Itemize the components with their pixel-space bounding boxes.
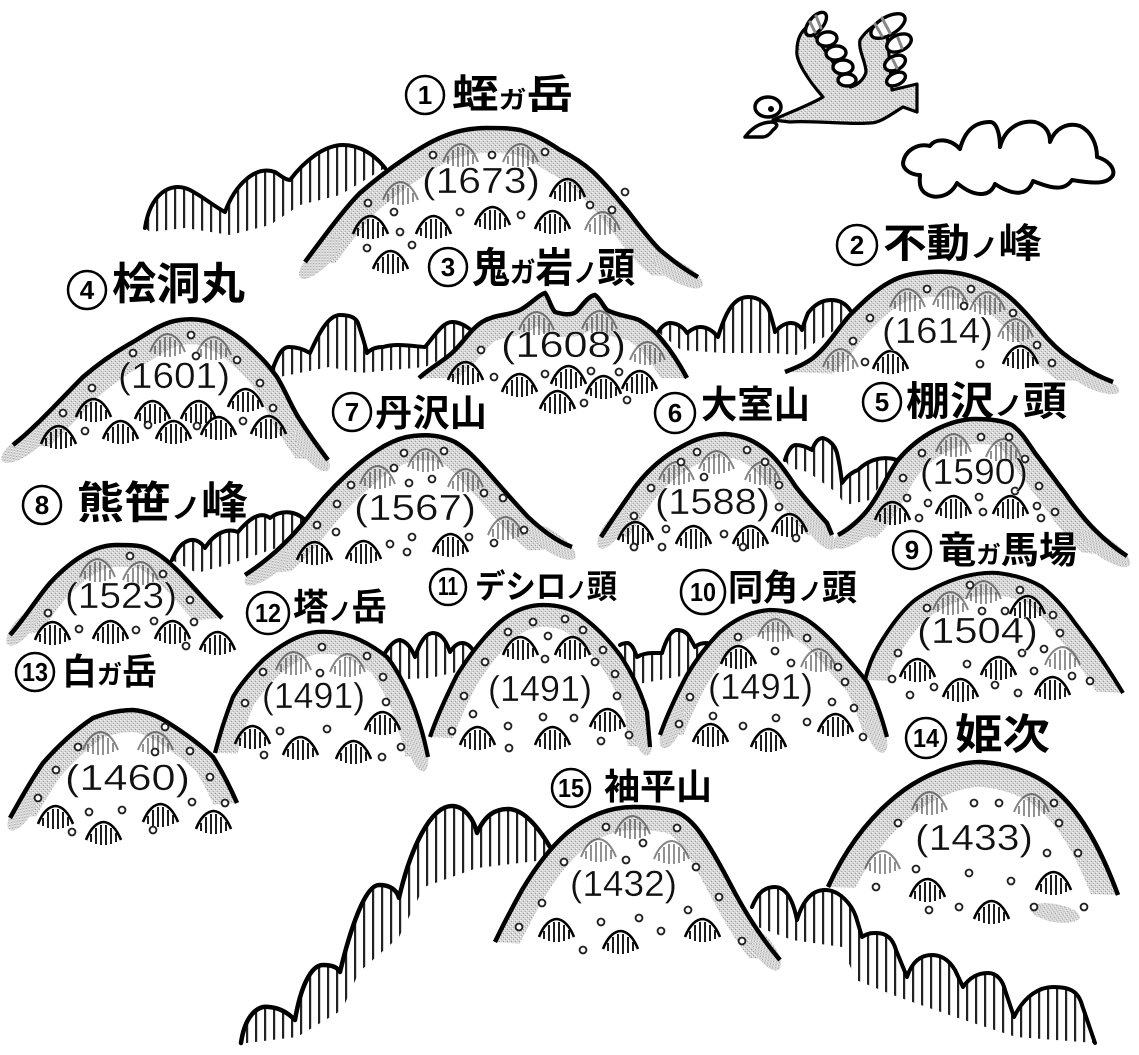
elevation: (1460)	[65, 757, 190, 798]
label: 丹沢山: 丹沢山	[375, 393, 487, 434]
label: 鬼ガ岩ノ頭: 鬼ガ岩ノ頭	[472, 245, 635, 291]
label: 棚沢ノ頭: 棚沢 ノ頭	[906, 380, 1067, 424]
mountain 5: 棚沢ノ頭	[828, 380, 1135, 573]
label: デシロノ頭: デシロノ頭	[475, 568, 617, 605]
label: 不動ノ峰: 2	[850, 230, 864, 260]
mountain 15: 袖平山	[495, 766, 787, 975]
mountain 10: 同角ノ頭	[655, 567, 892, 756]
label: 丹沢山: 7	[345, 397, 359, 427]
elevation: (1491)	[488, 668, 592, 709]
elevation: (1673)	[422, 160, 540, 201]
label: 袖平山	[552, 766, 712, 807]
mountain 13: 白ガ岳	[2, 651, 237, 845]
label: 白ガ岳: 白ガ岳	[62, 651, 157, 692]
label: 姫次: 姫次	[955, 711, 1050, 758]
label: 大室山: 6	[668, 398, 682, 428]
label: 大室山: 大室山	[701, 385, 810, 427]
back hills: hatched ridges	[145, 145, 1095, 1043]
elevation: (1433)	[915, 817, 1033, 858]
label: 姫次: 14	[913, 723, 939, 753]
icon: cloud	[903, 122, 1113, 197]
label: 蛭ガ岳	[406, 73, 573, 117]
mountain 1: 蛭ガ岳	[293, 73, 707, 295]
elevation: (1504)	[917, 610, 1038, 651]
mountain 2: 不動ノ峰	[785, 222, 1122, 399]
label: 蛭ガ岳: 蛭 ガ岳	[452, 73, 573, 117]
mountain 14: 姫次	[828, 711, 1118, 926]
mountain 12: 塔ノ岳	[215, 587, 432, 774]
elevation: (1601)	[118, 355, 230, 396]
label: 白ガ岳: 13	[22, 657, 48, 687]
elevation: (1590)	[920, 451, 1028, 492]
label: 竜ガ馬場: 9	[905, 535, 919, 565]
label: 桧洞丸: 4	[80, 275, 95, 305]
mountain 8: 熊笹ノ峰	[1, 479, 248, 655]
label: 同角ノ頭: 10	[690, 577, 716, 607]
label: 同角ノ頭: 同角ノ頭	[728, 567, 857, 608]
elevation: (1588)	[655, 481, 770, 522]
label: 袖平山: 袖平山	[604, 766, 712, 807]
mountain 6: 大室山	[592, 385, 841, 555]
icon: bird	[745, 9, 917, 137]
elevation: (1491)	[708, 666, 813, 707]
mountain 9: 竜ガ馬場	[865, 530, 1123, 702]
elevation: (1491)	[262, 675, 365, 716]
mountain 11: デシロノ頭	[430, 568, 655, 757]
label: 蛭ガ岳: 1	[418, 80, 432, 110]
label: 塔ノ岳: 塔ノ岳	[293, 587, 387, 628]
label: 白ガ岳	[16, 651, 157, 692]
elevation: (1523)	[65, 575, 177, 616]
label: 桧洞丸: 桧洞丸	[112, 260, 245, 309]
label: 塔ノ岳	[247, 587, 387, 634]
elevation: (1567)	[354, 487, 476, 528]
label: 熊笹ノ峰: 熊笹ノ峰	[77, 479, 248, 528]
label: 同角ノ頭	[681, 567, 857, 614]
label: 熊笹ノ峰: 8	[35, 490, 49, 520]
elevation: (1432)	[570, 863, 677, 904]
label: 不動ノ峰: 不動 ノ峰	[883, 222, 1042, 266]
label: 竜ガ馬場: 竜ガ馬場	[938, 530, 1077, 571]
label: 袖平山: 15	[558, 773, 584, 803]
mountain 4: 桧洞丸	[0, 260, 336, 477]
label: デシロノ頭: 11	[438, 571, 458, 601]
elevation: (1608)	[501, 324, 626, 365]
mountain 7: 丹沢山	[240, 393, 581, 591]
mountain 3: 鬼ガ岩ノ頭	[419, 245, 687, 414]
label: 大室山	[655, 385, 810, 433]
label: 姫次	[906, 711, 1050, 758]
label: 鬼ガ岩ノ頭: 3	[441, 252, 455, 282]
elevation: (1614)	[882, 310, 993, 351]
label: 塔ノ岳: 12	[255, 598, 281, 628]
label: 棚沢ノ頭: 5	[875, 387, 889, 417]
